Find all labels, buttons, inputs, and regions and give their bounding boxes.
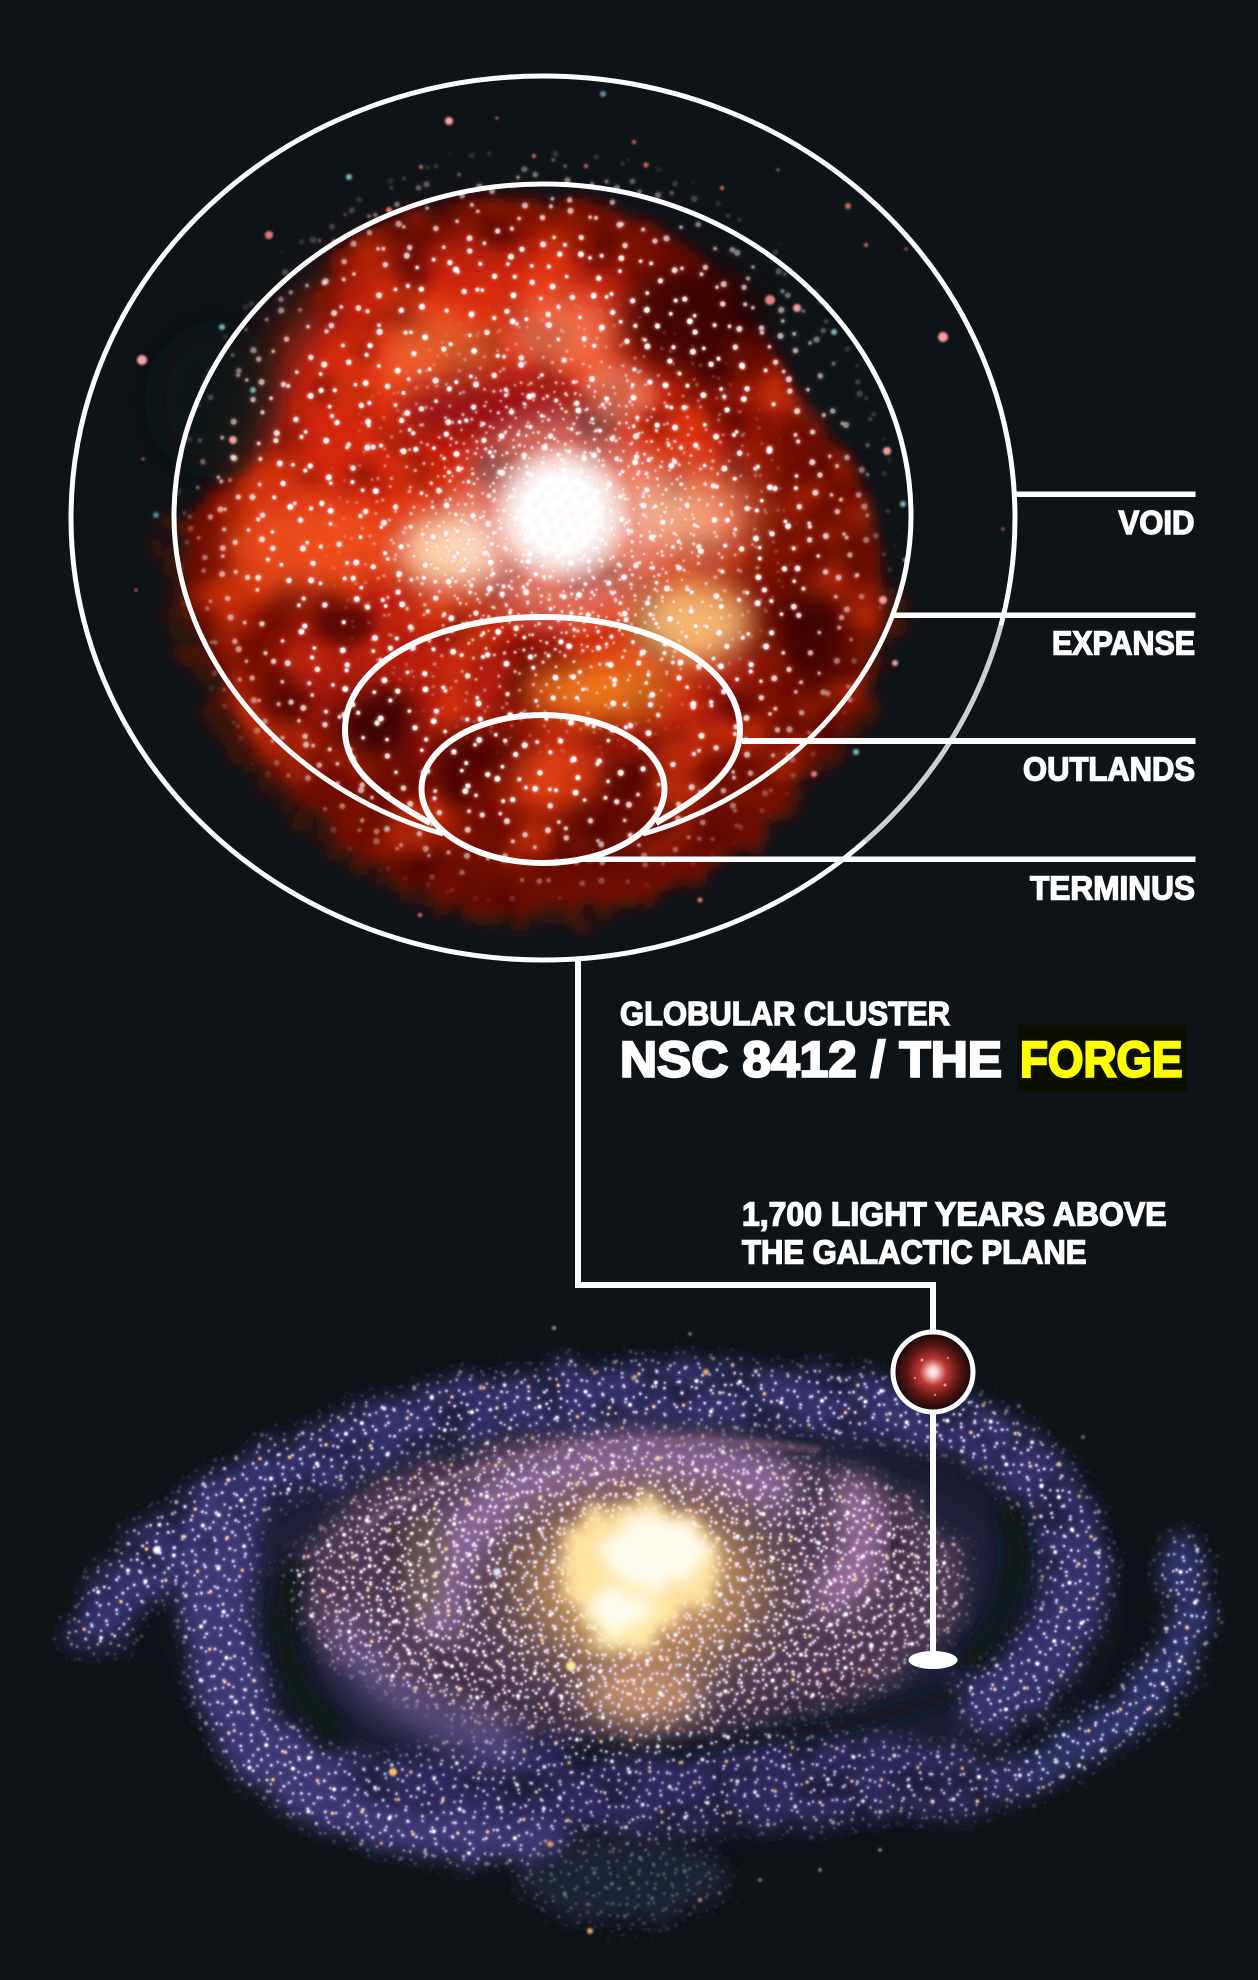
leader line: void [1015,492,1196,497]
ring: terminus [422,715,664,863]
height annotation: THE GALACTIC PLANE [742,1233,1086,1270]
connector from cluster down to marker [578,960,933,1332]
title highlight: FORGE [1020,1032,1182,1088]
ring: void [71,76,1015,960]
leader line: outlands [742,738,1196,744]
nebula: red globular cluster image [144,150,913,938]
title block [620,995,1187,1092]
leader line: expanse [894,612,1196,618]
ring: expanse [174,184,911,834]
marker: stem and base on galactic plane [908,1414,958,1669]
height annotation: 1,700 LIGHT YEARS ABOVE [742,1195,1166,1232]
leader line: terminus [580,856,1196,862]
height annotation [742,1195,1166,1270]
label: void: VOID [1118,504,1194,541]
label: expanse: EXPANSE [1052,624,1195,661]
label: terminus: TERMINUS [1030,869,1195,906]
label: outlands: OUTLANDS [1023,750,1195,787]
ring: outlands [345,617,740,823]
title: NSC 8412 / THE [620,1032,1002,1088]
scattered outer stars [134,91,1004,917]
highlight box [1018,1025,1187,1092]
subtitle: GLOBULAR CLUSTER [620,995,950,1032]
galaxy: spiral image [40,1320,1240,1960]
marker: miniature cluster [893,1332,973,1412]
